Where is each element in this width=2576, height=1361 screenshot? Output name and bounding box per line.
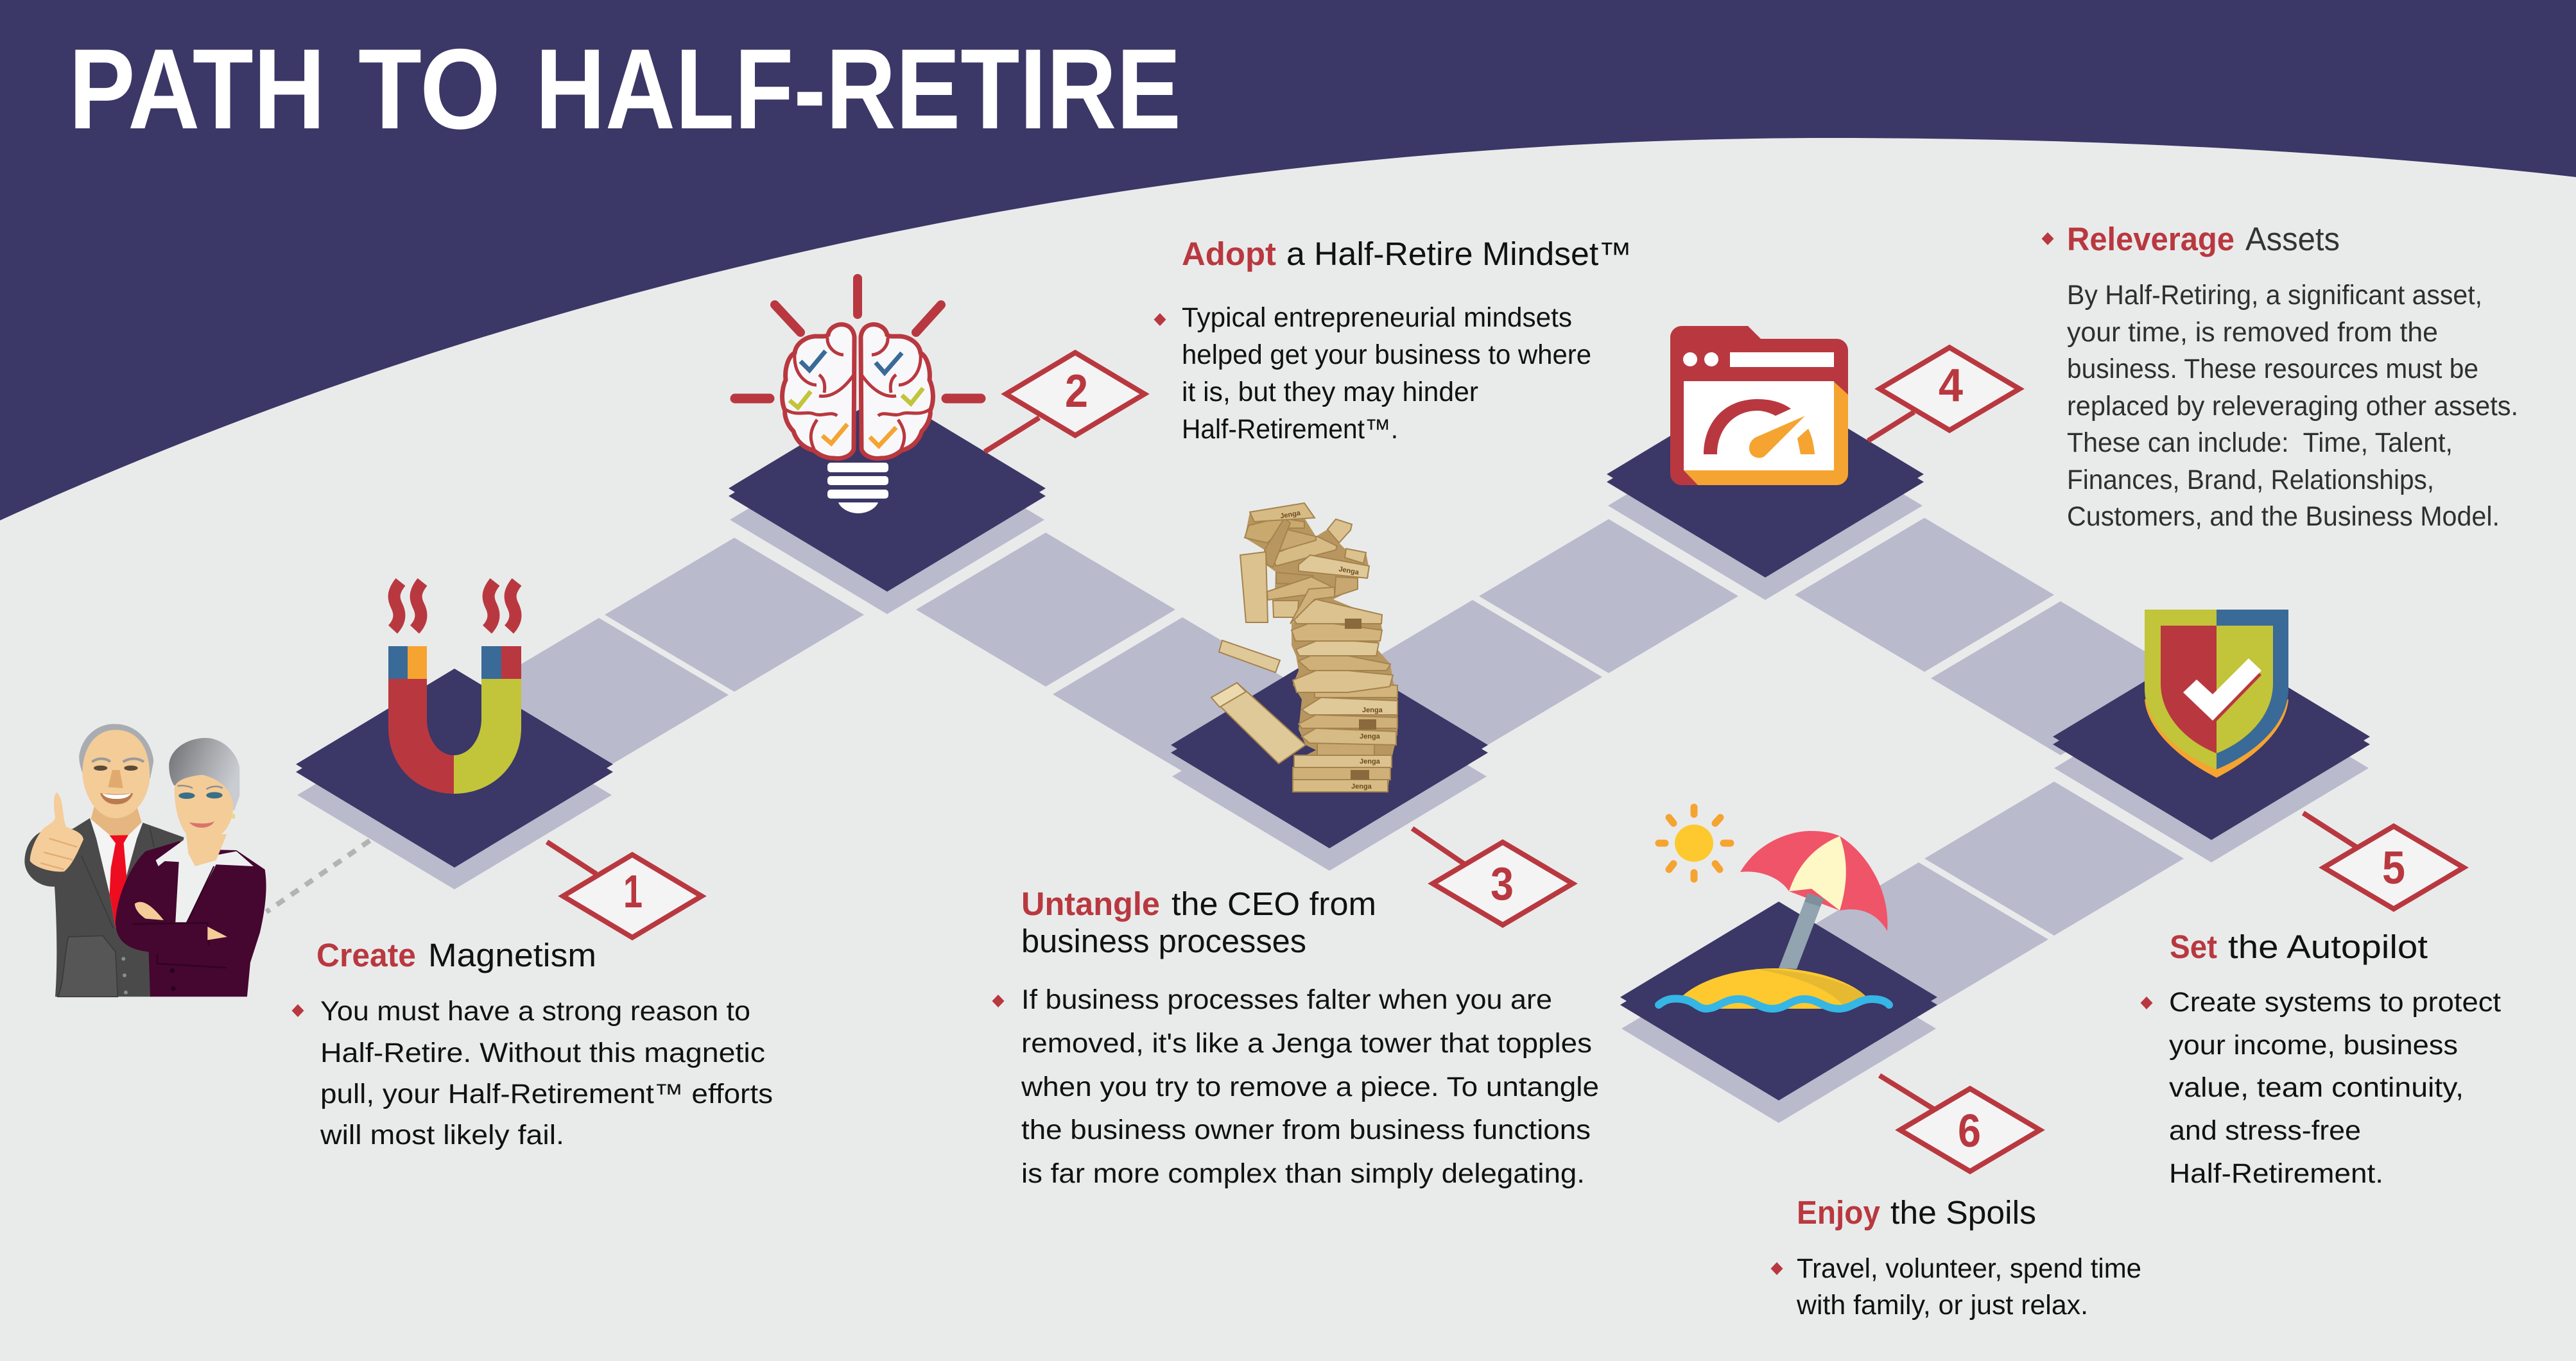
badge 1 xyxy=(547,842,702,937)
platform 5 xyxy=(2053,641,2370,862)
text 4 xyxy=(2067,280,2518,532)
text 2: it is, but they may hinder xyxy=(1182,377,1478,407)
step 6 spoils xyxy=(1620,807,2141,1321)
text 3 xyxy=(992,984,1599,1189)
heading 6: the Spoils xyxy=(1890,1194,2036,1231)
icon: sun xyxy=(1659,807,1731,879)
badge 6 xyxy=(1880,1075,2040,1172)
text 3: when you try to remove a piece. To untangle xyxy=(1021,1072,1599,1102)
text 4: your time, is removed from the xyxy=(2067,317,2438,348)
man hair xyxy=(79,724,153,778)
tower gaps xyxy=(1345,619,1376,780)
text 3: is far more complex than simply delegating. xyxy=(1021,1158,1585,1189)
heading 2: a Half-Retire Mindset™ xyxy=(1286,235,1632,272)
man shirt xyxy=(90,818,143,929)
badge 4: 4 xyxy=(1939,360,1963,411)
heading 6 xyxy=(1797,1194,2036,1231)
text 1: Half-Retire. Without this magnetic xyxy=(320,1038,765,1068)
text 2: helped get your business to where xyxy=(1182,339,1591,370)
woman buttons xyxy=(170,968,175,991)
jenga labels: Jenga xyxy=(1279,509,1302,520)
badge 2 xyxy=(985,353,1145,452)
text 5: Create systems to protect xyxy=(2169,987,2501,1018)
text 2 xyxy=(1154,302,1591,445)
finger lines xyxy=(40,839,77,869)
text 5: value, team continuity, xyxy=(2169,1072,2464,1103)
heading 5: the Autopilot xyxy=(2228,929,2428,965)
icon: magnet xyxy=(388,582,521,794)
woman neck xyxy=(186,834,227,866)
badge 3: 3 xyxy=(1491,859,1514,910)
step 5 autopilot xyxy=(2053,610,2501,1189)
text 4: replaced by releveraging other assets. xyxy=(2067,391,2518,422)
platform 6 xyxy=(1620,902,1937,1123)
title: PATH xyxy=(69,25,325,153)
jenga labels xyxy=(1279,509,1383,791)
icon: brain bulb xyxy=(735,278,981,513)
platform 3 xyxy=(1171,649,1488,871)
text 4: These can include: Time, Talent, xyxy=(2067,427,2453,458)
heading 3: Untangle xyxy=(1021,886,1160,922)
title: TO xyxy=(358,25,501,153)
jenga labels: Jenga xyxy=(1362,706,1383,714)
platform 2 xyxy=(729,393,1046,614)
text 3: removed, it's like a Jenga tower that topples xyxy=(1021,1028,1592,1059)
heading 5: Set xyxy=(2170,929,2217,965)
text 4: Customers, and the Business Model. xyxy=(2067,501,2500,532)
text 4: Finances, Brand, Relationships, xyxy=(2067,465,2434,495)
dashed connector xyxy=(266,841,370,912)
step 1 magnetism xyxy=(291,582,773,1151)
jenga labels: Jenga xyxy=(1360,733,1381,740)
heading 4: Assets xyxy=(2245,221,2340,257)
heading 2: Adopt xyxy=(1182,235,1276,272)
title xyxy=(69,25,1181,153)
step 3 untangle xyxy=(992,503,1599,1189)
step 4 releverage xyxy=(1607,221,2518,600)
badge 4 xyxy=(1868,348,2019,441)
icon: jenga tower xyxy=(1211,503,1397,792)
tower silhouette xyxy=(1245,503,1397,792)
text 4: By Half-Retiring, a significant asset, xyxy=(2067,280,2482,311)
text 6: Travel, volunteer, spend time xyxy=(1797,1253,2141,1284)
text 6: with family, or just relax. xyxy=(1796,1290,2088,1321)
text 6 xyxy=(1770,1253,2141,1321)
text 3: the business owner from business functions xyxy=(1021,1115,1591,1145)
badge 5 xyxy=(2303,813,2464,909)
jenga labels: Jenga xyxy=(1360,758,1381,766)
text 5: Half-Retirement. xyxy=(2169,1158,2383,1189)
man face xyxy=(82,730,150,818)
man jacket shading xyxy=(58,828,154,997)
text 5: and stress-free xyxy=(2169,1115,2361,1146)
text 3: If business processes falter when you are xyxy=(1021,984,1552,1015)
man buttons xyxy=(121,957,128,995)
man thumbs-up hand xyxy=(30,792,83,872)
badge 2: 2 xyxy=(1065,366,1088,417)
icon: beach umbrella and island xyxy=(1659,831,1889,1009)
woman features xyxy=(178,785,235,828)
text 1: pull, your Half-Retirement™ efforts xyxy=(320,1079,773,1109)
badge 1: 1 xyxy=(623,866,643,918)
woman blouse xyxy=(156,839,254,922)
woman hands xyxy=(135,902,164,920)
woman jacket xyxy=(116,841,266,997)
path tiles xyxy=(469,518,2190,1016)
heading 3: business processes xyxy=(1021,923,1306,959)
text 2: Typical entrepreneurial mindsets xyxy=(1182,302,1572,333)
woman forearm hand xyxy=(207,927,227,940)
jenga labels: Jenga xyxy=(1338,565,1360,577)
text 1: will most likely fail. xyxy=(320,1120,564,1151)
man jacket xyxy=(24,818,184,997)
step 2 mindset xyxy=(729,235,1632,614)
heading 4: Releverage xyxy=(2067,221,2235,257)
heading 5 xyxy=(2170,929,2428,965)
platform 4 xyxy=(1607,379,1924,600)
woman hair xyxy=(169,738,239,810)
woman jacket folds xyxy=(133,866,227,968)
jenga labels: Jenga xyxy=(1351,783,1372,791)
text 5: your income, business xyxy=(2169,1030,2458,1061)
text 2: Half-Retirement™. xyxy=(1182,414,1398,445)
text 1: You must have a strong reason to xyxy=(320,996,750,1027)
man features xyxy=(92,758,144,804)
icon: browser gauge xyxy=(1670,326,1848,485)
badge 6: 6 xyxy=(1958,1106,1981,1157)
man neck xyxy=(91,807,142,836)
badge 3 xyxy=(1412,828,1573,925)
woman face xyxy=(175,775,233,843)
heading 1 xyxy=(316,937,596,973)
platform 1 xyxy=(296,669,613,889)
man tie xyxy=(110,835,128,929)
heading 4 xyxy=(2041,221,2340,257)
heading 3: the CEO from xyxy=(1171,886,1376,922)
heading 1: Create xyxy=(316,937,416,973)
heading 3 xyxy=(1021,886,1376,959)
title: HALF-RETIRE xyxy=(535,25,1181,153)
icon: shield xyxy=(2145,610,2288,778)
text 5 xyxy=(2140,987,2501,1189)
header banner xyxy=(0,0,2576,520)
heading 1: Magnetism xyxy=(428,937,596,973)
heading 6: Enjoy xyxy=(1797,1194,1881,1231)
tower blocks xyxy=(1211,503,1397,792)
text 4: business. These resources must be xyxy=(2067,354,2478,384)
badge 5: 5 xyxy=(2382,843,2405,894)
people illustration xyxy=(24,724,266,997)
text 1 xyxy=(291,996,773,1151)
